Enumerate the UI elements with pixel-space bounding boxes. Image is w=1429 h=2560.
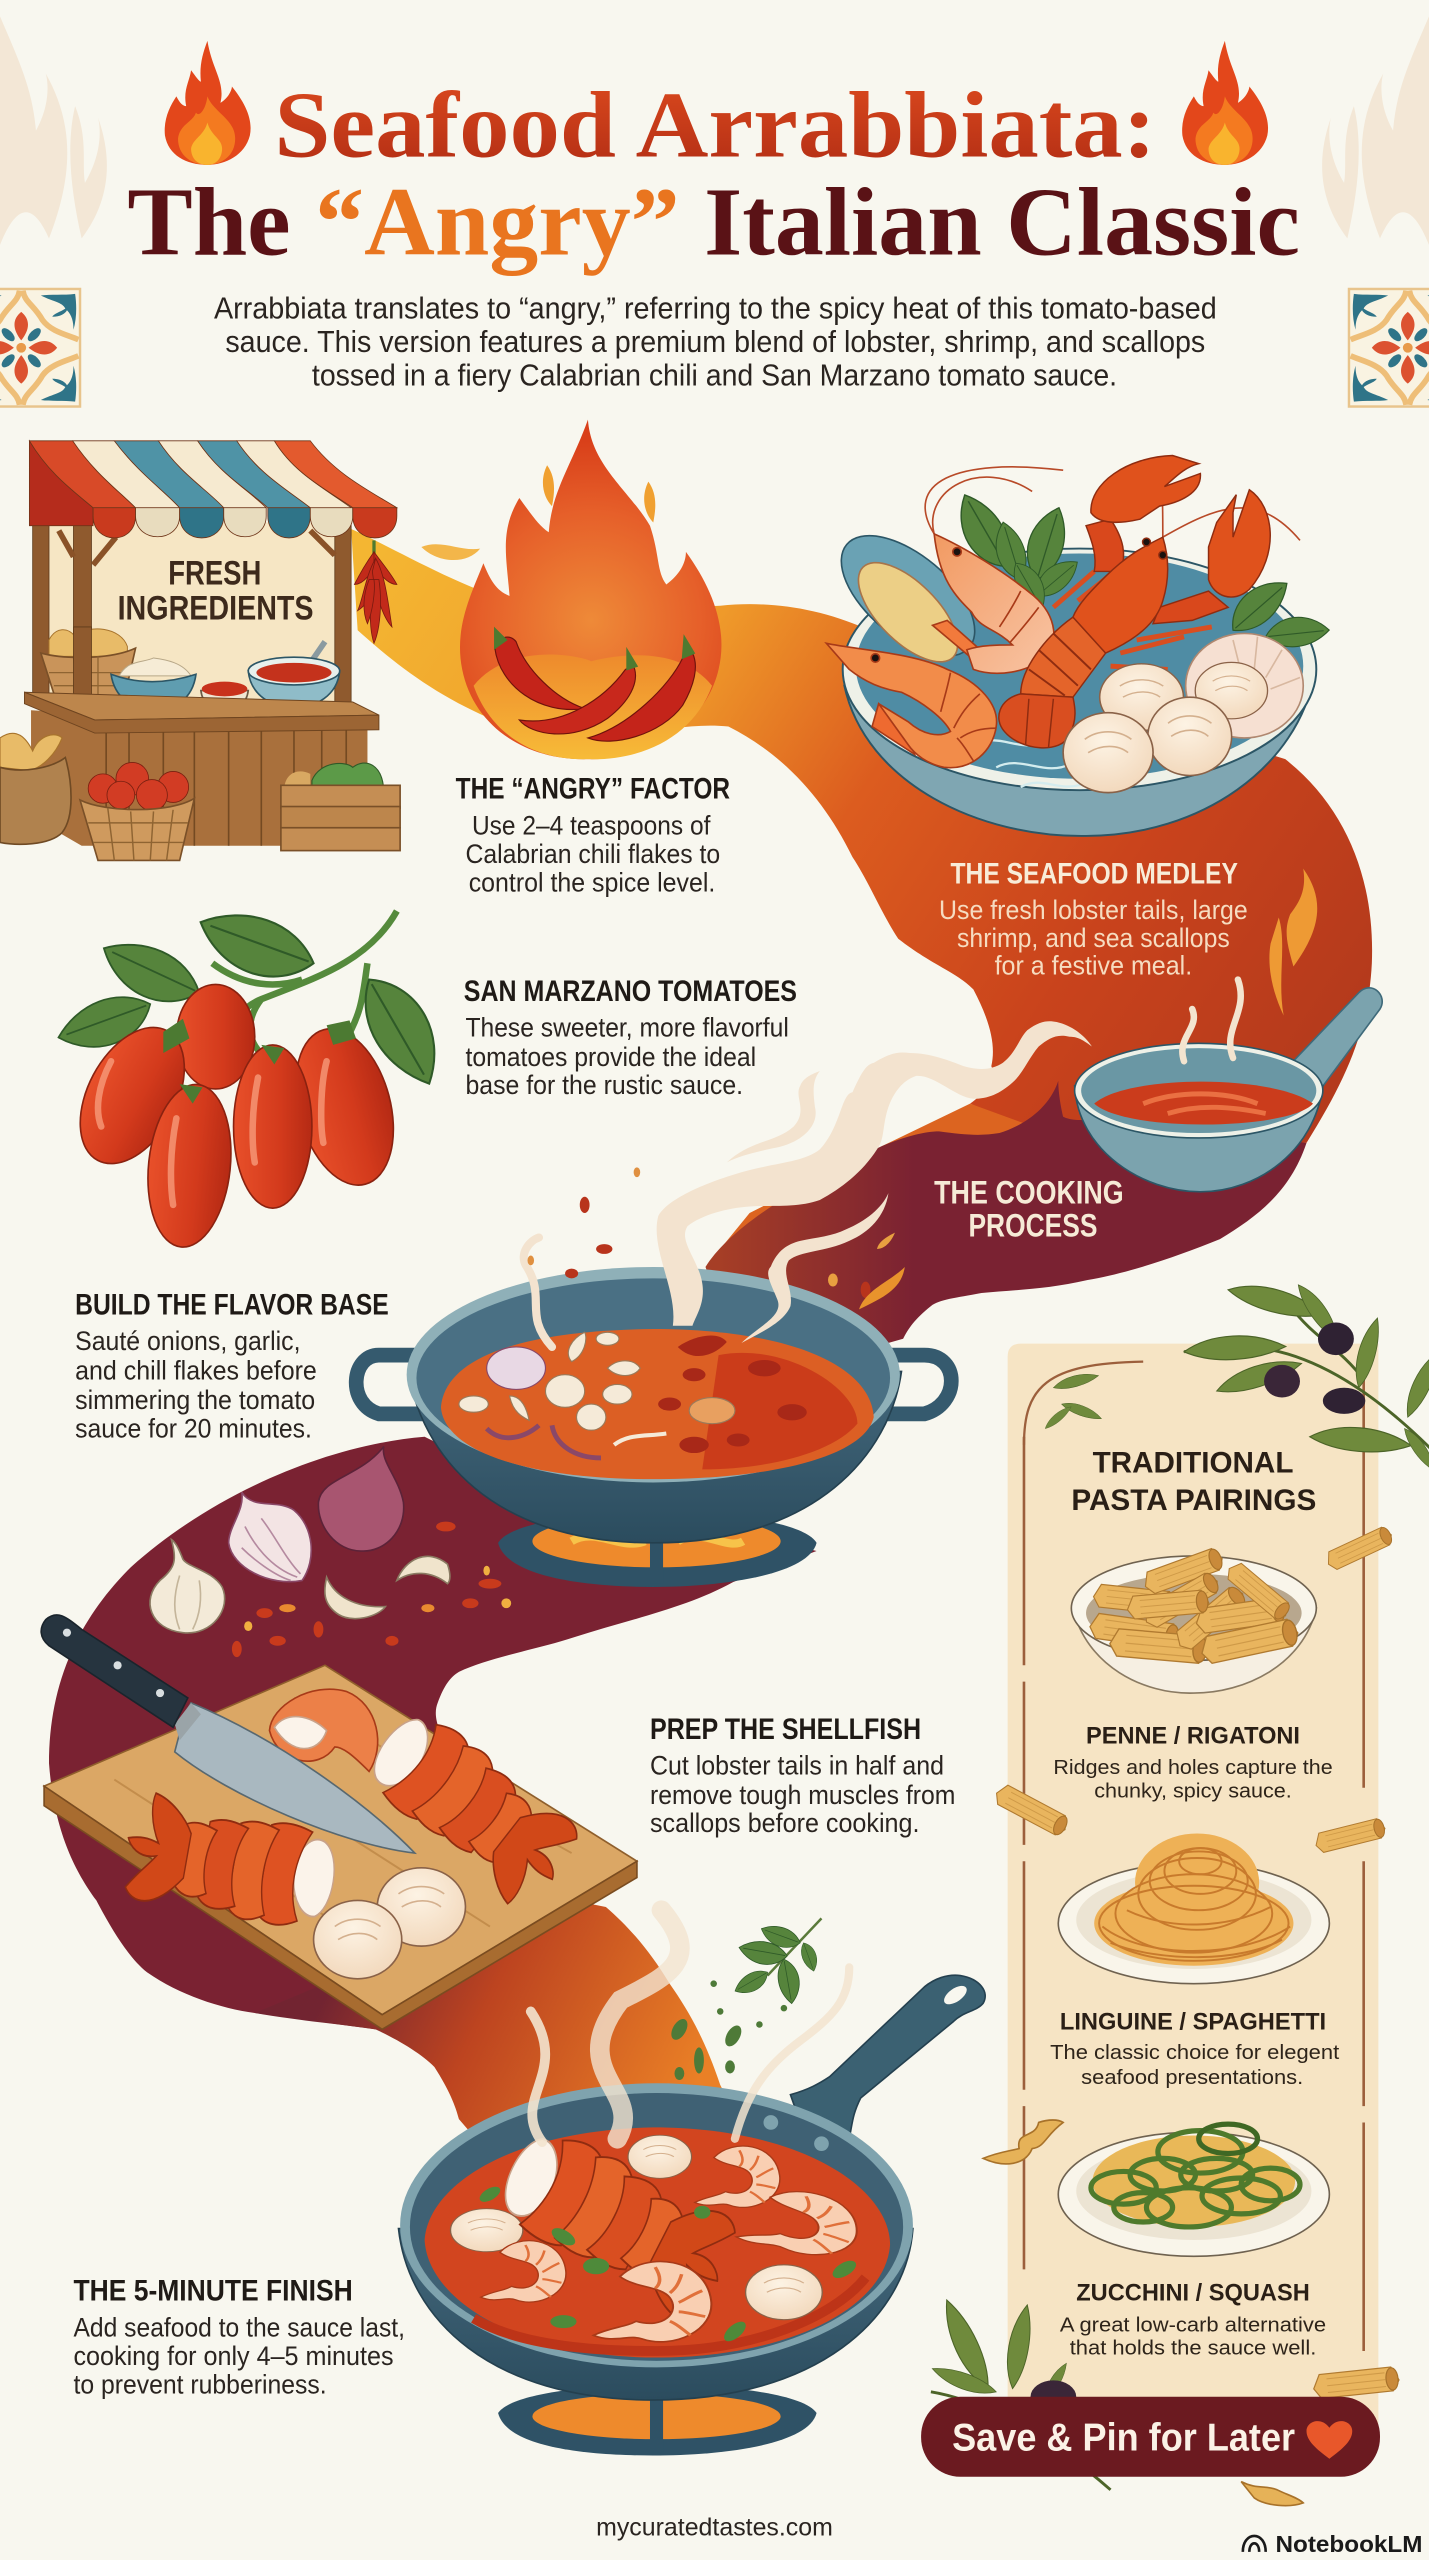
decoration: loose pasta pieces xyxy=(983,1525,1400,2506)
title: The “Angry” Italian Classic xyxy=(127,169,1300,277)
decorative river flames xyxy=(1269,869,1317,1016)
text: build the flavor base: BUILD THE FLAVOR BASE xyxy=(75,1288,389,1321)
lobster tail in pan xyxy=(486,2119,746,2326)
sauce xyxy=(425,2127,890,2358)
scallops on board xyxy=(377,1868,465,1946)
panel background xyxy=(1008,1344,1378,2424)
bowl body xyxy=(844,673,1315,836)
lobster xyxy=(999,456,1270,748)
illustration: cutting board with knife and shellfish xyxy=(41,1615,637,2029)
mussel xyxy=(820,513,996,679)
steam and falling herbs xyxy=(531,1910,849,2142)
burner xyxy=(498,1512,817,1587)
illustration: onions, garlic and chili flakes xyxy=(150,1447,511,1657)
tomato 4 xyxy=(140,1080,239,1251)
leaves xyxy=(93,929,208,1017)
panel: traditional pasta pairings xyxy=(1008,1344,1378,2424)
linguine text: seafood presentations. xyxy=(1081,2067,1303,2089)
icon: right patterned tile xyxy=(1349,289,1429,407)
handles xyxy=(356,1355,428,1414)
penne text xyxy=(1053,1724,1333,1803)
herb bits in pan xyxy=(477,2184,859,2345)
title: Seafood Arrabbiata: xyxy=(274,74,1156,178)
text: the cooking process xyxy=(934,1173,1124,1244)
text: the seafood medley: shrimp, and sea scallops xyxy=(957,923,1230,953)
awning xyxy=(29,441,397,538)
text: the seafood medley: for a festive meal. xyxy=(995,951,1192,981)
scallops in pan xyxy=(628,2135,692,2178)
crate of greens xyxy=(281,763,400,851)
text: build the flavor base xyxy=(75,1288,389,1444)
tomato 3 xyxy=(234,1045,312,1208)
icon: left title flame xyxy=(165,41,251,165)
handle xyxy=(790,1975,985,2139)
illustration: saucepan with steam xyxy=(1075,980,1382,1192)
icon: left patterned tile xyxy=(0,289,80,407)
text: build the flavor base: and chill flakes before xyxy=(75,1356,317,1386)
flowing sauce river: orange lower section xyxy=(255,1894,735,2155)
chili flakes xyxy=(232,1522,511,1657)
wok body xyxy=(408,1371,901,1543)
garlic cloves xyxy=(397,1556,450,1584)
text: the 5-minute finish: Add seafood to the sauce last, xyxy=(73,2312,405,2342)
heading: TRADITIONAL xyxy=(1093,1447,1293,1480)
flowing sauce river: orange band xyxy=(706,1104,1078,1306)
heading xyxy=(1071,1447,1316,1517)
zucchini text: ZUCCHINI / SQUASH xyxy=(1076,2280,1310,2306)
text: san marzano tomatoes: SAN MARZANO TOMATOES xyxy=(464,975,797,1008)
text: the 5-minute finish: THE 5-MINUTE FINISH xyxy=(73,2274,353,2307)
zucchini text: that holds the sauce well. xyxy=(1070,2337,1316,2359)
flowing sauce river: maroon lower section xyxy=(49,1437,817,2029)
stall sign backdrop xyxy=(49,522,335,705)
zucchini text: A great low-carb alternative xyxy=(1060,2314,1326,2336)
text: build the flavor base: sauce for 20 minutes. xyxy=(75,1414,312,1444)
text: san marzano tomatoes: These sweeter, more flavorful xyxy=(465,1013,789,1043)
stall posts xyxy=(33,522,351,709)
button: save and pin for later xyxy=(921,2397,1380,2477)
basket of tomatoes xyxy=(80,762,194,860)
footer: website: mycuratedtastes.com xyxy=(596,2514,833,2542)
text: san marzano tomatoes: tomatoes provide the ideal xyxy=(465,1042,756,1072)
label: fresh ingredients xyxy=(118,554,314,628)
text: prep the shellfish: scallops before cooking. xyxy=(650,1808,919,1838)
lobster tail: right xyxy=(353,1701,588,1916)
flame flick near stall xyxy=(421,544,480,560)
bread basket on counter xyxy=(41,629,136,699)
label: fresh ingredients: INGREDIENTS xyxy=(118,590,314,628)
small sauce bowl xyxy=(201,682,248,711)
big steam ribbons xyxy=(524,1021,1092,1347)
text: the seafood medley: THE SEAFOOD MEDLEY xyxy=(950,857,1238,890)
illustration: fresh ingredients market stall xyxy=(0,441,400,860)
text: the cooking process: PROCESS xyxy=(968,1207,1097,1244)
text: prep the shellfish: PREP THE SHELLFISH xyxy=(650,1713,921,1746)
shrimp top xyxy=(933,534,1054,673)
sauce xyxy=(441,1329,874,1479)
text: build the flavor base: Sauté onions, garlic, xyxy=(75,1326,300,1356)
illustration: final skillet with seafood on burner xyxy=(398,1910,985,2456)
chilies xyxy=(495,637,695,741)
linguine text xyxy=(1050,2009,1340,2089)
text: the 5-minute finish: to prevent rubberiness. xyxy=(73,2369,327,2399)
shrimp in pan xyxy=(695,2146,780,2207)
zucchini text xyxy=(1060,2280,1326,2359)
blue sauce bowl xyxy=(248,642,340,708)
spaghetti plate xyxy=(1058,1833,1329,1984)
illustration: seafood bowl xyxy=(820,456,1331,836)
bowl with garlic xyxy=(111,658,196,711)
decoration: left corner flame xyxy=(0,16,107,245)
text: prep the shellfish: Cut lobster tails in half and xyxy=(650,1751,944,1781)
footer: notebooklm mark: NotebookLM xyxy=(1275,2531,1422,2557)
text: san marzano tomatoes xyxy=(464,975,797,1100)
heading: PASTA PAIRINGS xyxy=(1071,1484,1316,1517)
icon: right title flame xyxy=(1182,41,1268,165)
decoration: olive branch bottom left xyxy=(929,2296,1111,2490)
tomato 1 xyxy=(59,1010,206,1181)
penne bowl xyxy=(1071,1546,1316,1693)
cut onion xyxy=(229,1492,311,1582)
button: save and pin for later: Save & Pin for Later xyxy=(952,2417,1295,2460)
text: the angry factor: control the spice level. xyxy=(469,867,715,897)
intro text block: sauce. This version features a premium blend of lobster, shrimp, and scallops xyxy=(225,326,1205,359)
text: build the flavor base: simmering the tomato xyxy=(75,1385,315,1415)
illustration: big flame with chilies xyxy=(460,420,721,759)
text: the angry factor xyxy=(456,772,730,897)
illustration: wok with tomato sauce on burner xyxy=(356,1267,951,1587)
text: the angry factor: Use 2–4 teaspoons of xyxy=(472,810,711,840)
illustration: parsley sprig xyxy=(731,1918,821,2005)
vine xyxy=(204,911,397,1110)
shrimp bottom xyxy=(826,643,997,768)
chili flakes and embers around steam xyxy=(528,1167,905,1309)
intro text block xyxy=(214,292,1217,392)
board xyxy=(44,1665,637,2015)
text: the angry factor: Calabrian chili flakes to xyxy=(465,839,720,869)
panel side rules xyxy=(1024,1380,1364,2351)
text: prep the shellfish xyxy=(650,1713,955,1838)
intro text block: Arrabbiata translates to “angry,” referring to the spicy heat of this tomato-based xyxy=(214,292,1217,325)
penne text: Ridges and holes capture the xyxy=(1053,1757,1333,1779)
penne text: PENNE / RIGATONI xyxy=(1086,1724,1300,1750)
sack of bread xyxy=(0,733,71,844)
herb leaves xyxy=(947,487,1331,650)
scallop shell and scallops xyxy=(1186,633,1303,738)
text: the seafood medley xyxy=(939,857,1248,981)
flowing sauce river: maroon cooking section xyxy=(706,1081,1307,1363)
red onion xyxy=(318,1447,404,1551)
decoration: right corner flame xyxy=(1322,16,1429,245)
title xyxy=(127,74,1300,277)
text: san marzano tomatoes: base for the rustic sauce. xyxy=(465,1070,743,1100)
penne text: chunky, spicy sauce. xyxy=(1094,1781,1292,1803)
illustration: tomatoes on the vine xyxy=(52,899,456,1251)
text: the angry factor: THE “ANGRY” FACTOR xyxy=(456,772,730,805)
text: the cooking process: THE COOKING xyxy=(934,1173,1124,1210)
knife xyxy=(41,1615,415,1853)
highlights xyxy=(98,1061,327,1205)
flowing sauce river: upper xyxy=(351,529,1372,1143)
back tomato xyxy=(176,984,255,1089)
linguine text: LINGUINE / SPAGHETTI xyxy=(1060,2009,1326,2035)
text: the 5-minute finish: cooking for only 4–5 minutes xyxy=(73,2341,394,2371)
icon: heart xyxy=(1307,2421,1352,2459)
posts over the basket xyxy=(73,627,91,709)
tomato chunks xyxy=(658,1336,807,1453)
decoration: olive branch top right xyxy=(1183,1278,1429,1478)
lobster tail: left xyxy=(118,1790,343,1933)
onions and garlic pieces xyxy=(459,1332,735,1458)
text: prep the shellfish: remove tough muscles from xyxy=(650,1780,955,1810)
zucchini plate xyxy=(1058,2124,1329,2256)
label: fresh ingredients: FRESH xyxy=(168,554,261,592)
pan body xyxy=(398,2229,913,2400)
tomato 2 xyxy=(280,1018,409,1196)
burner xyxy=(498,2385,817,2456)
text: the seafood medley: Use fresh lobster tails, large xyxy=(939,895,1248,925)
hanging chili bunch xyxy=(354,540,397,643)
calyx xyxy=(163,1019,356,1104)
counter xyxy=(24,692,379,846)
antennae xyxy=(925,467,1300,540)
garlic bulb xyxy=(150,1540,225,1633)
shrimp on board xyxy=(269,1689,378,1771)
text: the 5-minute finish xyxy=(73,2274,405,2399)
linguine text: The classic choice for elegent xyxy=(1050,2042,1340,2064)
intro text block: tossed in a fiery Calabrian chili and San Marzano tomato sauce. xyxy=(312,359,1117,392)
